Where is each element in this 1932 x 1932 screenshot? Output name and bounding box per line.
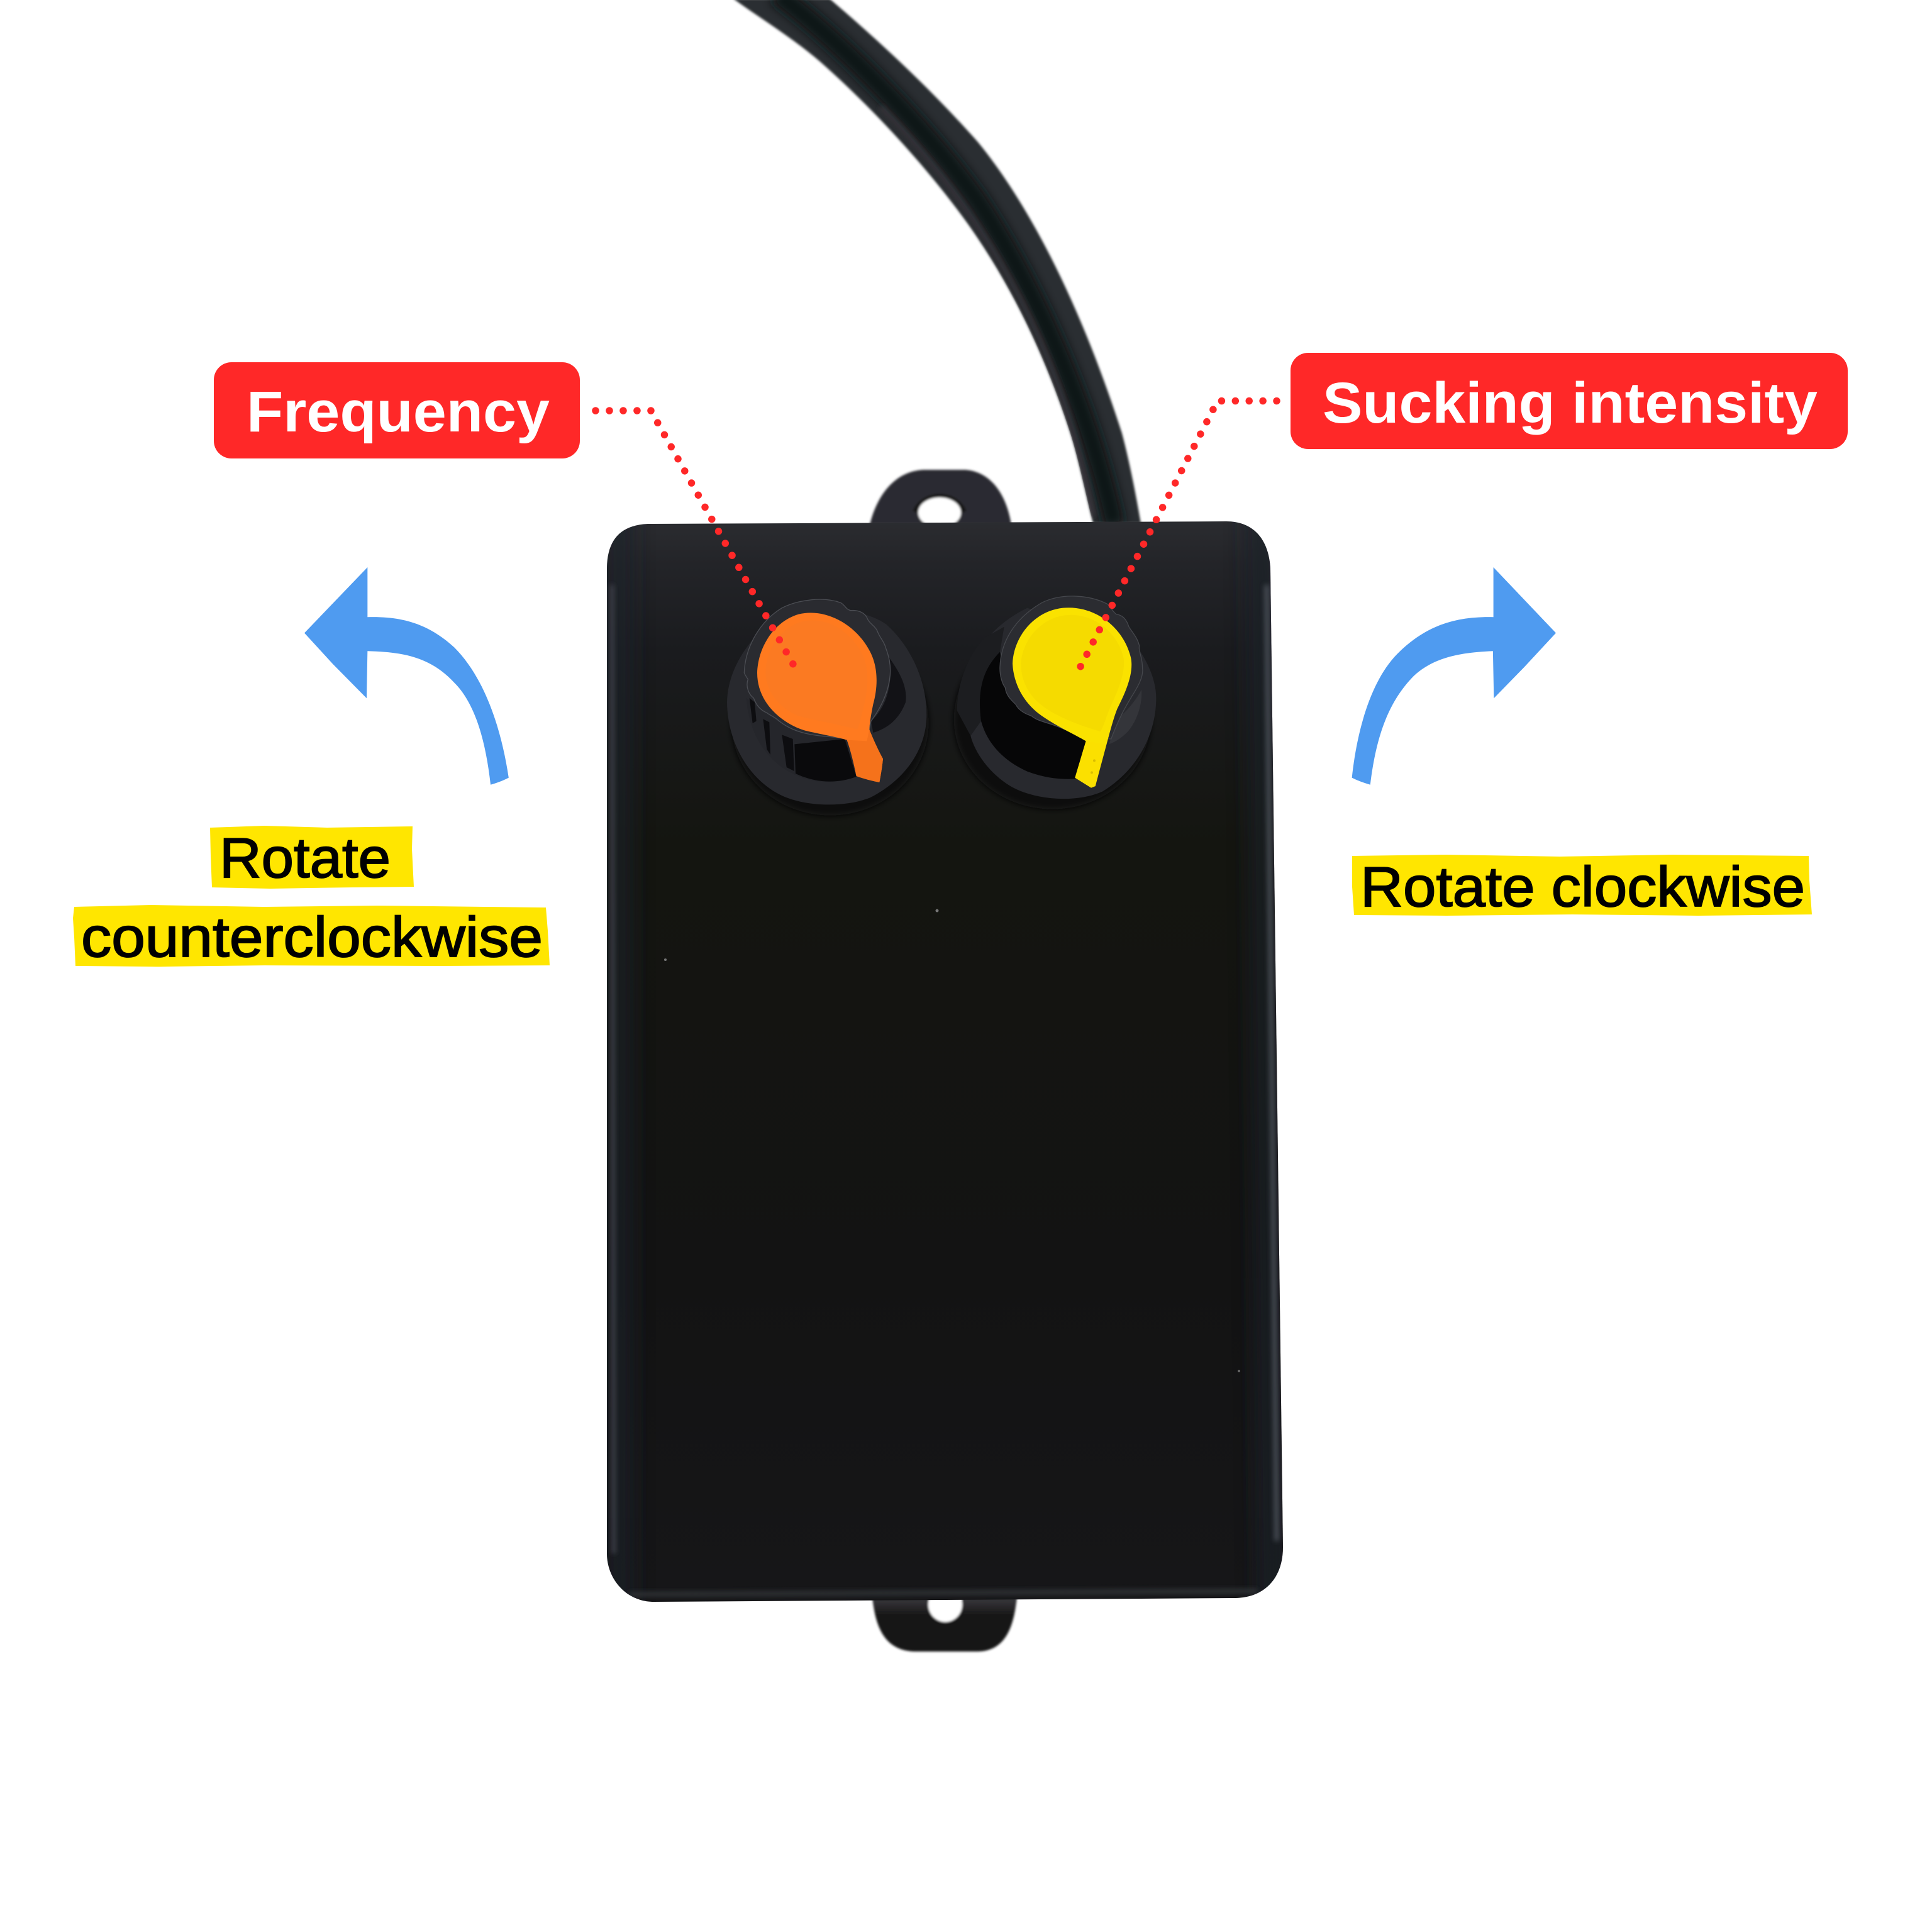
orange stem shade [847,730,883,782]
knob left flange [957,627,1004,736]
control box body [607,478,1283,1648]
top mounting tab [870,470,1011,528]
knob grip [747,698,857,782]
highlighted label: rotate counterclockwise: Rotate [219,827,391,890]
knob grip [980,652,1087,779]
highlighted label: rotate counterclockwise: counterclockwise [81,906,543,969]
callout: frequency: Frequency [247,380,550,444]
knob top ring [744,599,891,741]
callout: frequency [214,362,580,458]
leader line: frequency [596,411,793,664]
highlighted label: rotate counterclockwise [73,826,550,969]
knob right collar [871,657,906,733]
knob base shadow [954,629,1151,809]
orange cap facet [765,620,867,730]
knob: sucking intensity (yellow) [954,596,1156,809]
arrow: clockwise [1352,567,1556,785]
arrow: counterclockwise [304,567,509,785]
highlighted label: rotate clockwise: Rotate clockwise [1360,856,1805,919]
yellow cap facet [1021,615,1124,731]
knob base flange [969,608,1156,799]
orange pointer cap [757,613,883,782]
knob: frequency (orange) [727,599,929,816]
power cable [733,0,1141,525]
callout: sucking intensity [1291,353,1848,449]
leader line: sucking intensity [1080,401,1277,667]
knob top ring [1000,596,1143,739]
yellow pointer cap [1013,608,1131,788]
knob base shadow [731,631,929,816]
yellow stem [1075,741,1106,788]
knob base flange [727,609,926,804]
callout: sucking intensity: Sucking intensity [1323,371,1818,435]
bottom mounting tab [872,1587,1017,1652]
